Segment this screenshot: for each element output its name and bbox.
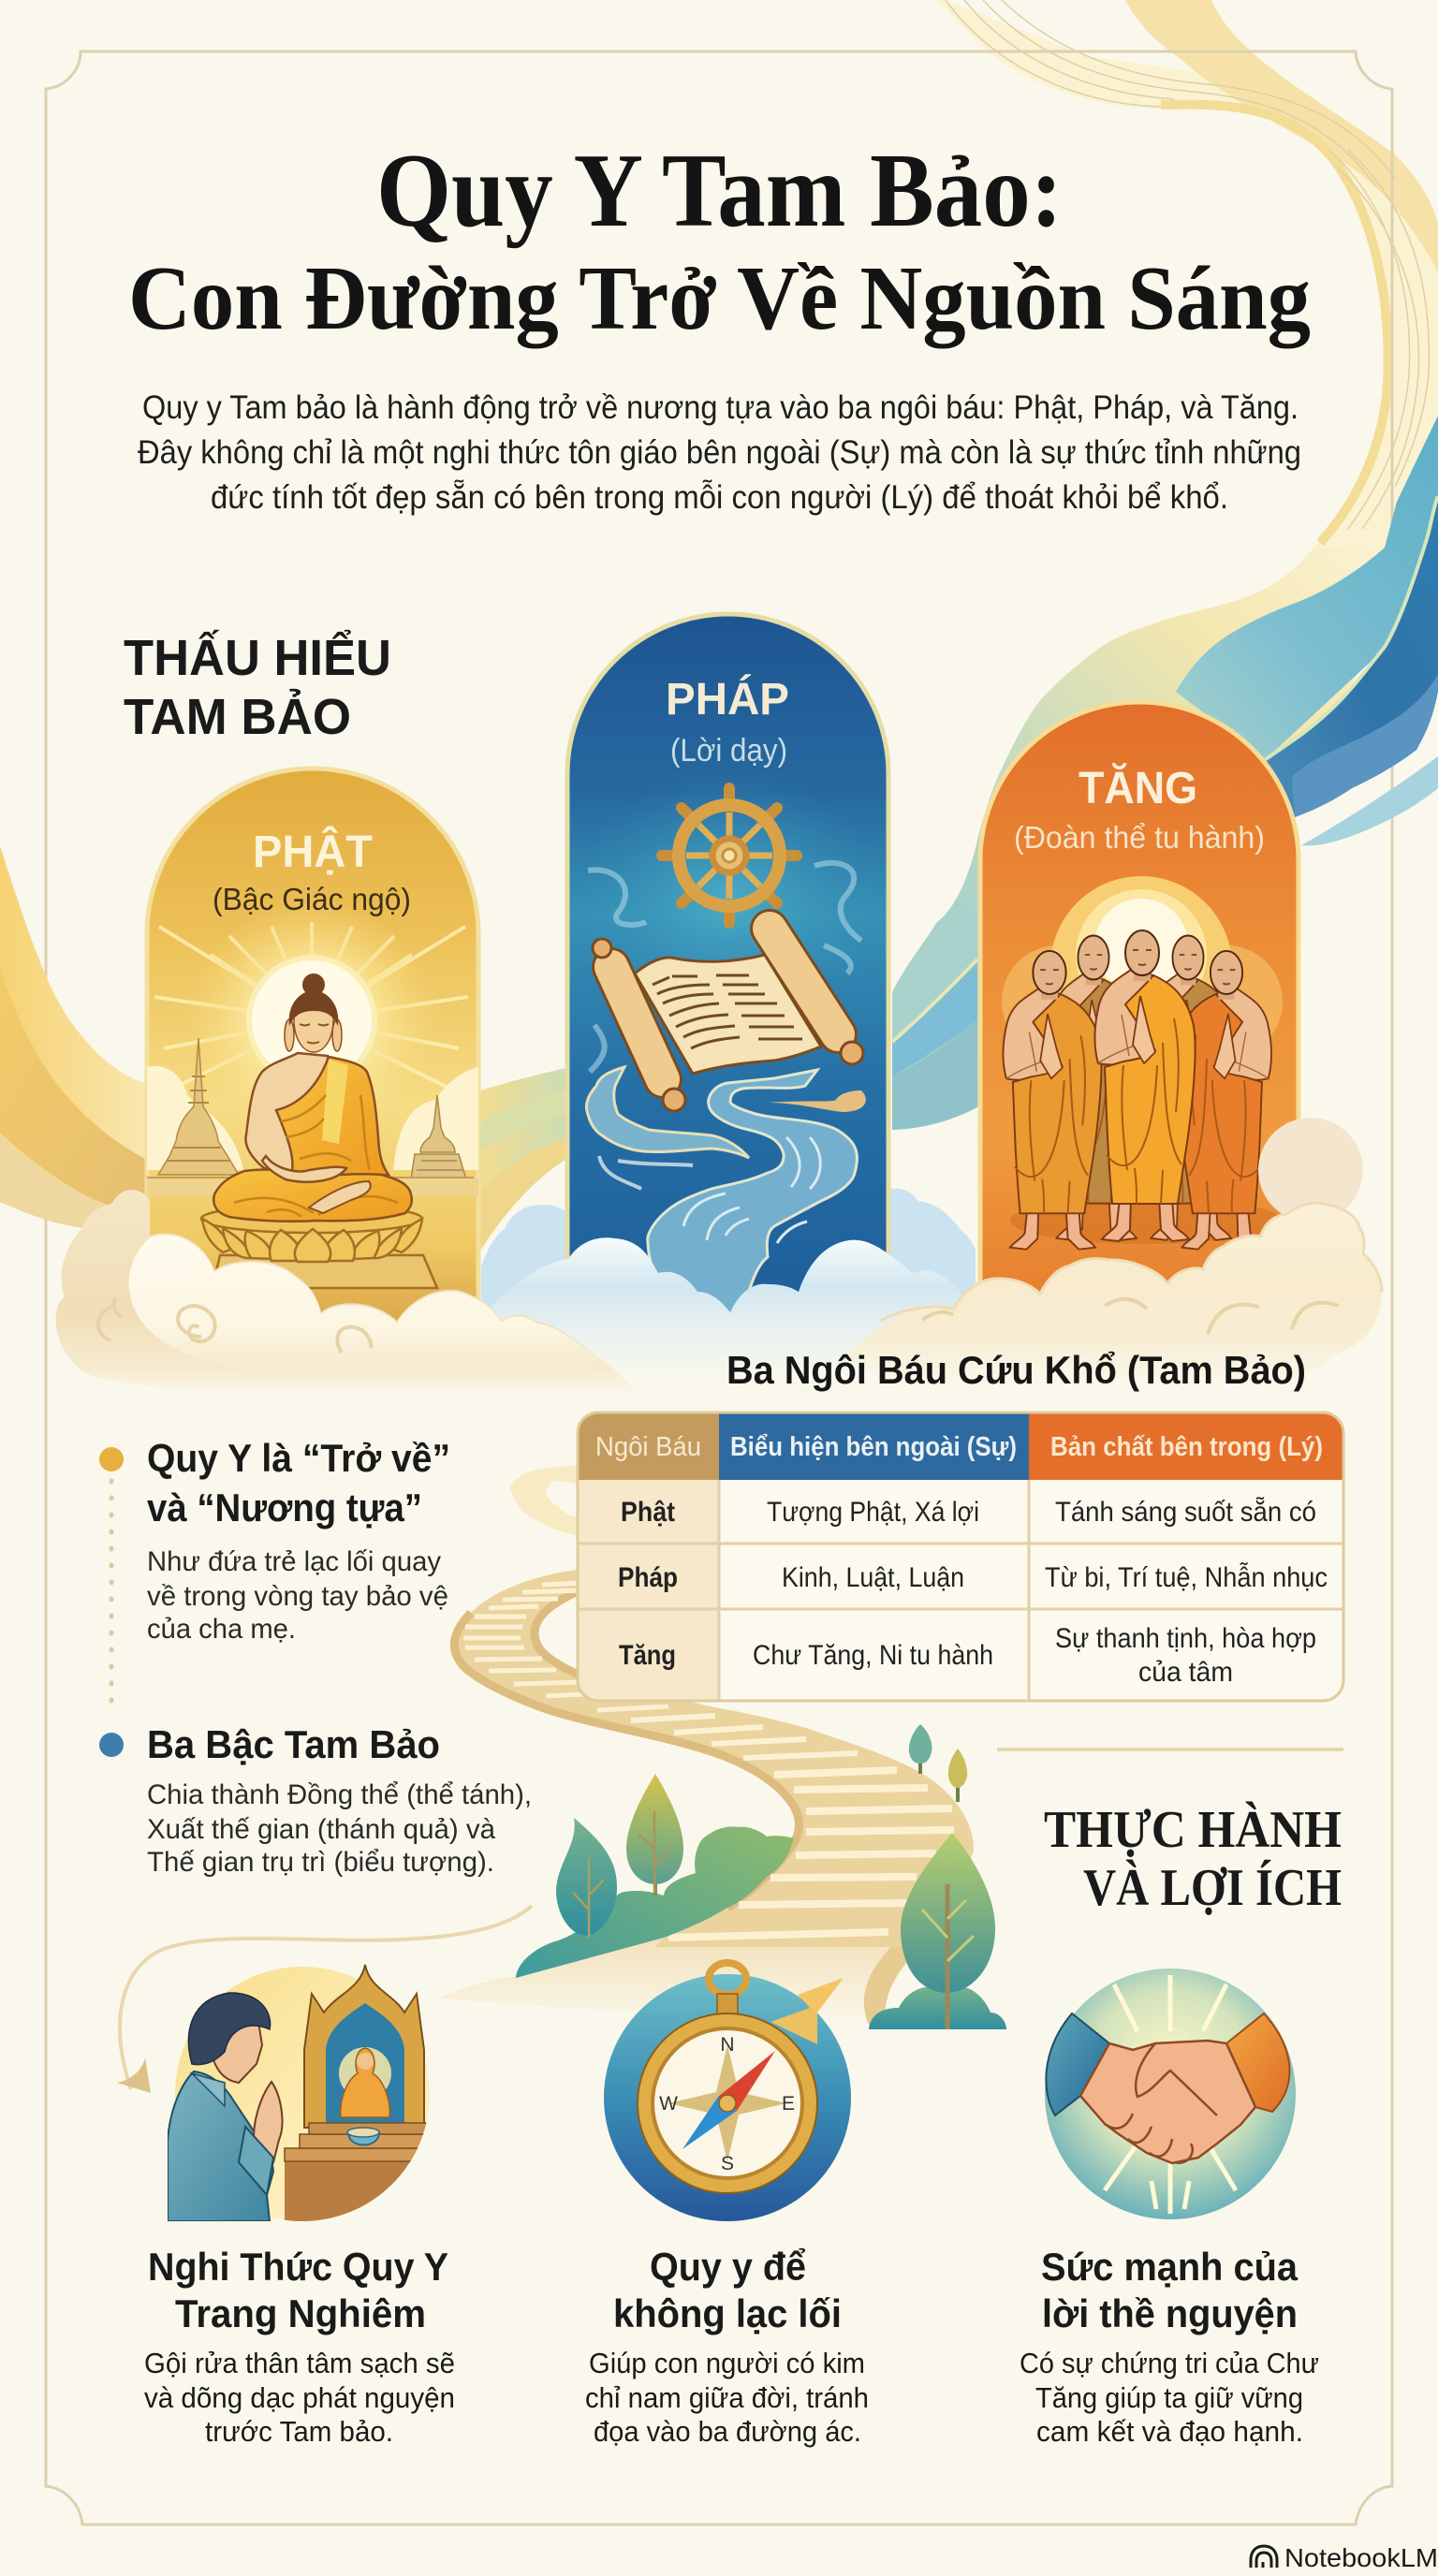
river: [586, 1067, 857, 1329]
label: Pháp: (Lời dạy): [670, 733, 787, 768]
hands: [1080, 2041, 1255, 2163]
table header text: Biểu hiện bên ngoài (Sự): [730, 1432, 1017, 1462]
altar table: [285, 2123, 431, 2221]
compass letters: W: [659, 2093, 678, 2115]
card: Sức mạnh: Tăng giúp ta giữ vững: [1035, 2381, 1303, 2414]
ears: [285, 1019, 294, 1051]
label: Pháp: [666, 674, 789, 768]
ribbon: thin pale teal: [1301, 756, 1438, 845]
cloud: blue front: [473, 1237, 992, 1381]
crossed legs: [213, 1170, 412, 1222]
robe: [276, 1057, 389, 1178]
needle: [718, 2051, 775, 2111]
ribbon: between Phật and Pháp: [477, 1068, 565, 1255]
bullet: blue dot: [99, 1733, 124, 1757]
label: Tăng: TĂNG: [1078, 763, 1197, 813]
dotted connector: [109, 1481, 114, 1715]
bun: [302, 973, 325, 996]
face: [294, 1006, 333, 1052]
block: Ba Bậc: Chia thành Đồng thể (thể tánh),: [147, 1779, 532, 1810]
block: Quy Y: Quy Y là “Trở về”: [147, 1436, 450, 1480]
pale clouds: [147, 1066, 243, 1170]
table: [578, 1412, 1343, 1701]
body skin: [245, 1053, 330, 1178]
gold arrow: [770, 1978, 844, 2044]
card: Sức mạnh: lời thề nguyện: [1042, 2291, 1298, 2335]
lotus throne: [201, 1205, 422, 1262]
shrine: [304, 1965, 424, 2128]
section heading: Thực hành và lợi ích: THỰC HÀNH: [1044, 1801, 1342, 1859]
section heading: Thực hành và lợi ích: VÀ LỢI ÍCH: [1083, 1859, 1342, 1917]
hands: [262, 1156, 346, 1182]
cloud: back ball right: [1258, 1118, 1363, 1222]
panel: Pháp: [567, 614, 888, 1329]
hair: [289, 990, 338, 1026]
person: [168, 1993, 282, 2221]
block: Ba Bậc: Thế gian trụ trì (biểu tượng).: [147, 1847, 494, 1878]
block: Ba Bậc: Ba Bậc Tam Bảo: [147, 1722, 440, 1766]
table header text: Bản chất bên trong (Lý): [1050, 1432, 1323, 1462]
table rows: Tăng: [619, 1640, 676, 1671]
block: Ba Bậc: Xuất thế gian (thánh quả) và: [147, 1814, 495, 1845]
table rows: Chư Tăng, Ni tu hành: [753, 1640, 993, 1671]
table rows: Từ bi, Trí tuệ, Nhẫn nhục: [1045, 1562, 1328, 1593]
pale upper path: [510, 1466, 585, 1537]
card: Quy y: chỉ nam giữa đời, tránh: [585, 2381, 869, 2414]
table rows: Pháp: [618, 1562, 678, 1593]
card: Quy y: đọa vào ba đường ác.: [594, 2415, 861, 2448]
panel: Phật: [147, 768, 478, 1329]
table heading: Ba Ngôi Báu Cứu Khổ (Tam Bảo): [726, 1348, 1306, 1392]
compass letters: [659, 2034, 795, 2174]
left sleeve: [1046, 2013, 1109, 2115]
compass letters: N: [720, 2034, 735, 2056]
icon: Buddha: [201, 973, 437, 1288]
section heading: Thực hành và lợi ích: [997, 1749, 1343, 1917]
title: Con Đường Trở Về Nguồn Sáng: [128, 248, 1311, 349]
card: Nghi thức: [144, 2245, 455, 2448]
cloud: left cream: [55, 1190, 637, 1395]
star: [668, 2045, 786, 2161]
card: Sức mạnh: [1020, 2245, 1319, 2448]
card: Sức mạnh: Có sự chứng tri của Chư: [1020, 2347, 1319, 2379]
title: [128, 133, 1311, 349]
table rows: Sự thanh tịnh, hòa hợp: [1055, 1623, 1316, 1654]
brand: NotebookLM: NotebookLM: [1284, 2543, 1438, 2572]
stair body: [454, 1569, 974, 1947]
section heading: Thấu hiểu Tam Bảo: TAM BẢO: [124, 689, 351, 745]
cloud: right contour: [881, 1203, 1382, 1321]
tree right: [869, 1833, 1006, 2029]
label: Tăng: [1014, 763, 1265, 855]
block: Quy Y: [147, 1436, 450, 1645]
right sleeve: [1226, 2013, 1290, 2112]
rays and glow: [154, 922, 468, 1095]
card: Sức mạnh: Sức mạnh của: [1041, 2245, 1299, 2289]
table header text: [595, 1432, 1323, 1462]
card: Nghi thức: Gội rửa thân tâm sạch sẽ: [144, 2347, 455, 2379]
ribbon: blue band: [1266, 496, 1438, 817]
block: Quy Y: của cha mẹ.: [147, 1614, 296, 1645]
table rows: Tánh sáng suốt sẵn có: [1055, 1497, 1316, 1528]
panel: Tăng: [980, 702, 1299, 1329]
ribbon: between Pháp and Tăng: [892, 959, 977, 1076]
table rows: [618, 1497, 1328, 1688]
trees and bushes left: [516, 1774, 794, 1978]
ribbon: pale green sweep behind Tăng: [892, 548, 1438, 1130]
icon: scroll: [593, 929, 863, 1111]
card: Nghi thức: Trang Nghiêm: [175, 2291, 426, 2335]
compass letters: E: [782, 2093, 795, 2115]
table rows: Kinh, Luật, Luận: [782, 1562, 964, 1593]
body: [638, 2013, 817, 2193]
block: Quy Y: về trong vòng tay bảo vệ: [147, 1581, 448, 1612]
intro text block: Đây không chỉ là một nghi thức tôn giáo bên ngoài (Sự) mà còn là sự thức tỉnh những: [138, 434, 1301, 471]
foot: [309, 1181, 371, 1213]
card: Nghi thức: trước Tam bảo.: [205, 2415, 393, 2448]
bushes: [516, 1826, 794, 1978]
cloud: blue back clouds: [481, 1184, 976, 1329]
stair steps: [463, 1583, 954, 1938]
ribbon: left gold: [0, 846, 147, 1259]
section heading: Thấu hiểu Tam Bảo: THẤU HIỂU: [124, 630, 391, 686]
ribbon: teal band: [1176, 416, 1438, 759]
wisps: [588, 863, 861, 1072]
ribbon: top right gold fan: [936, 0, 1438, 548]
table rows: của tâm: [1138, 1657, 1233, 1688]
tall tree: [626, 1774, 683, 1895]
glow: [1002, 945, 1052, 1023]
label: Tăng: (Đoàn thể tu hành): [1014, 820, 1265, 855]
card: Quy y: không lạc lối: [613, 2291, 842, 2335]
card: Quy y: Giúp con người có kim: [589, 2347, 865, 2379]
teal tree: [556, 1818, 617, 1938]
label: Pháp: PHÁP: [666, 674, 789, 724]
loop: [709, 1963, 746, 1995]
stupa left: [158, 1038, 239, 1175]
icon: compass: [604, 1963, 851, 2221]
table header text: Ngôi Báu: [595, 1432, 701, 1462]
left column bullets: [99, 1436, 532, 1878]
stair wall: [454, 1613, 799, 1908]
icon: dharma wheel: [662, 788, 797, 923]
label: Phật: PHẬT: [253, 826, 373, 877]
card: Sức mạnh: cam kết và đạo hạnh.: [1036, 2415, 1303, 2448]
block: Ba Bậc: [147, 1722, 532, 1878]
card: Nghi thức: Nghi Thức Quy Y: [148, 2245, 448, 2289]
table header: [578, 1412, 719, 1480]
label: Phật: [213, 826, 411, 916]
card: Quy y: Quy y để: [650, 2245, 806, 2289]
section heading: Thấu hiểu Tam Bảo: [124, 630, 391, 745]
label: Phật: (Bậc Giác ngộ): [213, 882, 411, 916]
small trees: [909, 1724, 967, 1802]
cloud: left inner highlight: [129, 1235, 599, 1376]
cloud curls: [98, 1298, 1339, 1353]
block: Quy Y: Như đứa trẻ lạc lối quay: [147, 1546, 441, 1577]
title: Quy Y Tam Bảo:: [376, 133, 1063, 249]
stairway: [439, 1466, 974, 2029]
bullet: gold dot: [99, 1447, 124, 1471]
intro text block: đức tính tốt đẹp sẵn có bên trong mỗi con người (Lý) để thoát khỏi bể khổ.: [211, 479, 1228, 516]
compass letters: S: [721, 2153, 734, 2174]
arrow: curved return path: [117, 1906, 532, 2093]
stupa right: [411, 1095, 466, 1179]
card: Nghi thức: và dõng dạc phát nguyện: [144, 2381, 455, 2414]
table rows: Tượng Phật, Xá lợi: [767, 1497, 979, 1528]
icon: ceremony: [168, 1965, 431, 2221]
cloud: right cream: [843, 1203, 1382, 1387]
icon: monks: [1003, 930, 1271, 1250]
card: Quy y: [585, 2245, 869, 2448]
pale lower path: [439, 1928, 936, 2027]
intro text block: Quy y Tam bảo là hành động trở về nương tựa vào ba ngôi báu: Phật, Pháp, và Tăng.: [142, 389, 1299, 426]
clouds: [55, 1118, 1382, 1395]
block: Quy Y: và “Nương tựa”: [147, 1486, 422, 1530]
intro text block: [138, 389, 1301, 516]
flowing ribbons: [0, 416, 1438, 1259]
icon: handshake: [1045, 1969, 1296, 2219]
table rows: Phật: [621, 1497, 675, 1528]
curled ribbon: [864, 1938, 927, 2029]
plinth: [213, 1255, 437, 1288]
